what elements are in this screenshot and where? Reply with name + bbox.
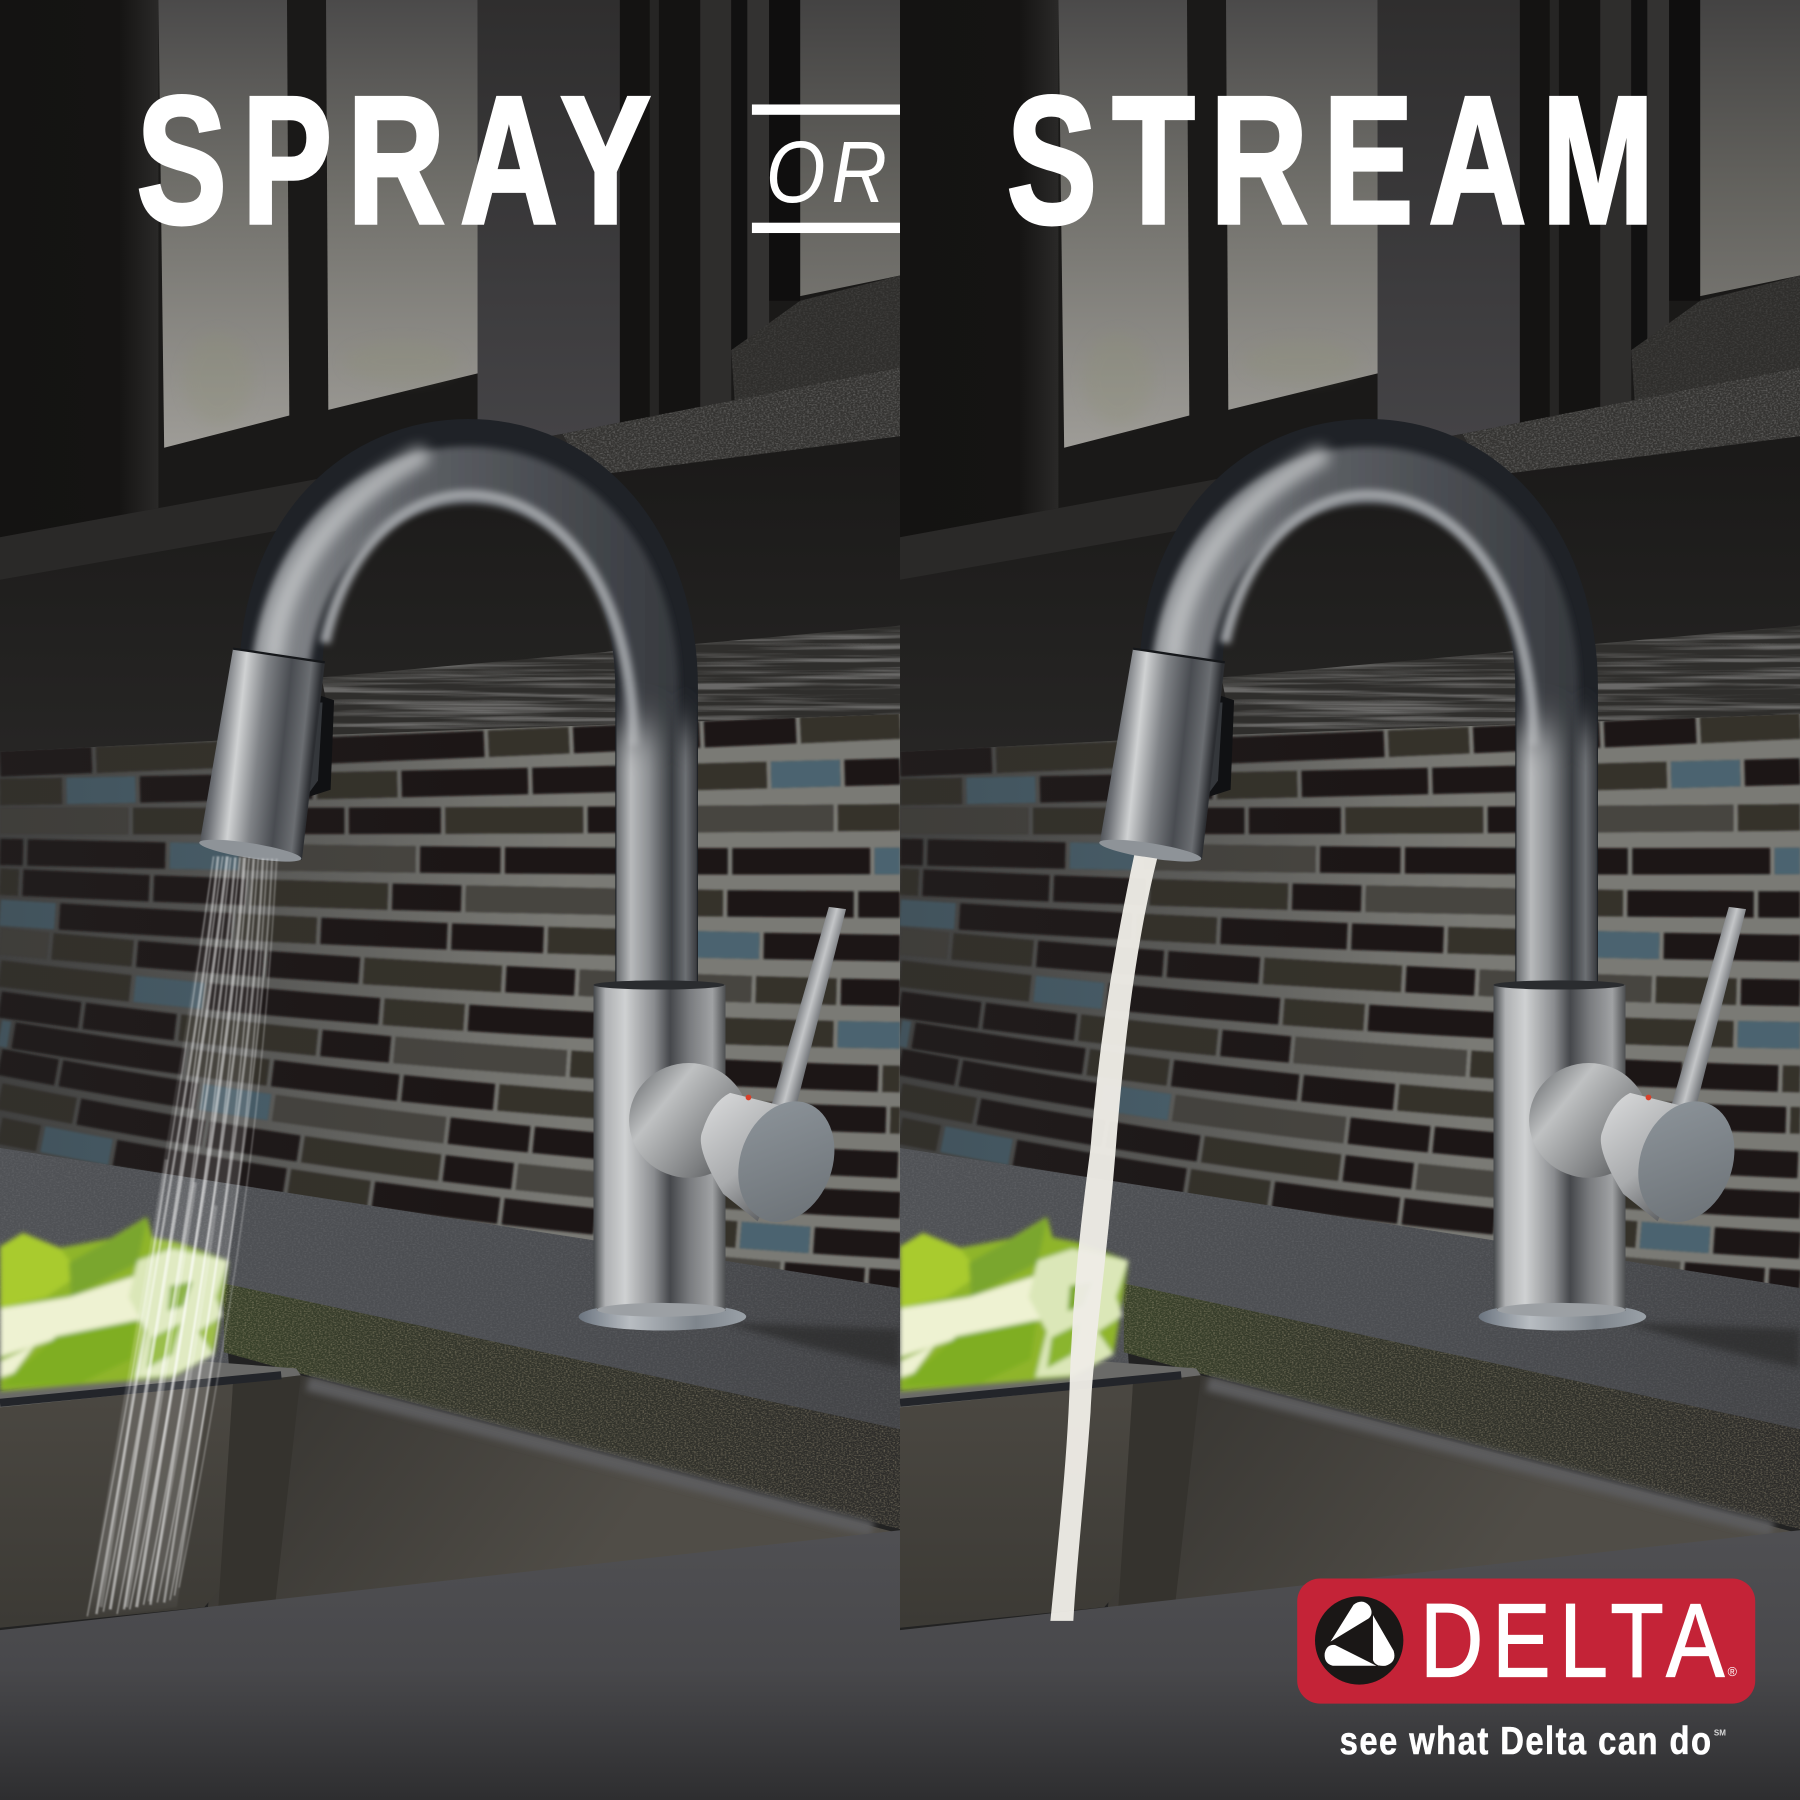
depth fade bbox=[0, 712, 482, 1309]
panel: spray scene bbox=[0, 0, 900, 1800]
ledge grain bbox=[562, 367, 900, 476]
title: stream: STREAM bbox=[1007, 58, 1670, 261]
spray water bbox=[86, 855, 279, 1620]
beam highlight bbox=[0, 434, 585, 580]
title: or bbox=[752, 104, 900, 233]
grout base bbox=[0, 712, 900, 1309]
sink back wall bbox=[207, 1375, 900, 1619]
beam under window bbox=[0, 367, 900, 758]
wood ledge bbox=[562, 367, 900, 476]
window pane one bbox=[158, 0, 289, 448]
window pane two bbox=[326, 0, 479, 410]
logo badge bbox=[1297, 1578, 1755, 1704]
faucet body bbox=[579, 980, 746, 1330]
sill grain bbox=[731, 276, 900, 402]
left window frame bbox=[0, 0, 158, 540]
window pane three bbox=[800, 0, 900, 296]
title: or: OR bbox=[766, 125, 893, 221]
upper wood sill bbox=[731, 276, 900, 402]
foreground counter bbox=[0, 1530, 900, 1800]
window mottling bbox=[184, 333, 459, 425]
logo emblem bbox=[1315, 1596, 1403, 1685]
shelf bbox=[321, 626, 900, 735]
delta logo bbox=[1297, 1578, 1755, 1704]
dark frame bars bbox=[620, 0, 800, 430]
title: spray: SPRAY bbox=[137, 58, 666, 261]
tagline: SM bbox=[1714, 1729, 1726, 1738]
sink rim bbox=[0, 1361, 301, 1407]
pull-down head bbox=[198, 649, 334, 866]
counter speckle bbox=[0, 1148, 900, 1435]
gooseneck spout bbox=[273, 457, 697, 1027]
panel: stream scene bbox=[900, 0, 1800, 1800]
sink dark corner bbox=[218, 1375, 301, 1611]
tagline: see what Delta can do bbox=[1340, 1718, 1712, 1763]
countertop surface bbox=[0, 1148, 900, 1435]
sink rim dark line bbox=[0, 1375, 281, 1403]
counter front edge bbox=[224, 1283, 900, 1529]
faucet shadow on counter bbox=[723, 1322, 900, 1368]
lettuce bbox=[0, 1217, 228, 1391]
logo wordmark: DELTA bbox=[1420, 1583, 1733, 1699]
tile rows bbox=[0, 726, 900, 1283]
sink left wall bbox=[0, 1383, 233, 1628]
tile backsplash bbox=[0, 712, 900, 1309]
edge speckle bbox=[224, 1283, 900, 1529]
stream water bbox=[1050, 855, 1157, 1621]
window column bbox=[478, 0, 620, 459]
sink back rim bbox=[308, 1383, 872, 1529]
faucet bbox=[198, 457, 851, 1330]
background wall bbox=[0, 0, 900, 758]
handle bbox=[629, 907, 851, 1236]
shelf grain bbox=[321, 626, 900, 735]
registered mark: ® bbox=[1728, 1665, 1738, 1679]
